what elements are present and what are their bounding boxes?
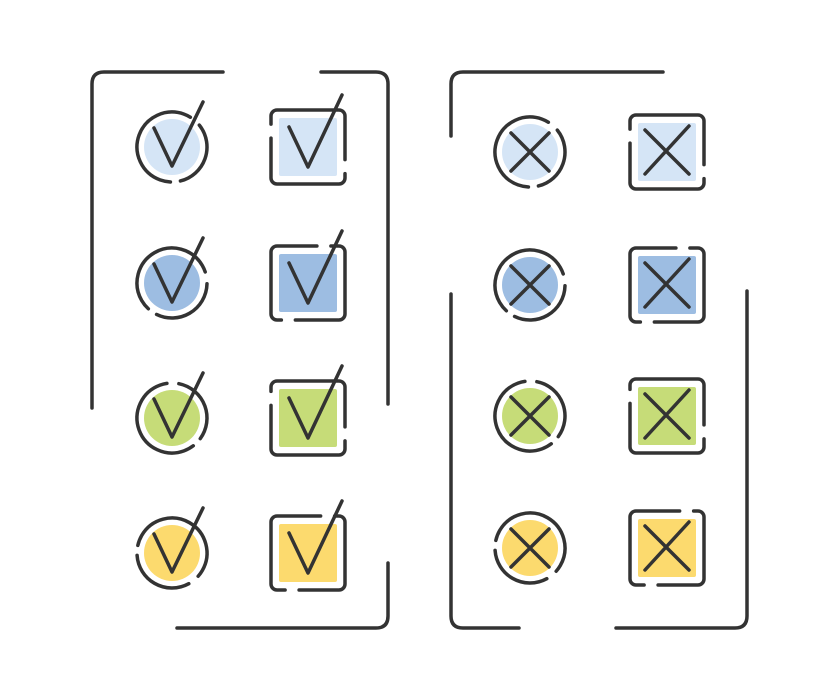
- icon: square cross green: [630, 379, 704, 453]
- panel: left frame: [92, 72, 388, 628]
- icon: circle cross green: [485, 371, 575, 461]
- icon: circle check light blue: [127, 102, 217, 192]
- icon: square cross blue: [630, 248, 704, 322]
- icon: circle cross light blue: [485, 107, 575, 197]
- icon: square check yellow: [271, 501, 345, 590]
- icon: square cross light blue: [630, 115, 704, 189]
- icon: circle cross yellow: [482, 500, 578, 596]
- icon: circle check yellow: [124, 505, 220, 601]
- icon: circle cross blue: [482, 237, 578, 333]
- icon: circle check green: [127, 373, 217, 463]
- icon: square check light blue: [271, 95, 345, 184]
- icon: square check green: [271, 366, 345, 455]
- icon: circle check blue: [124, 235, 220, 331]
- icon: square cross yellow: [630, 511, 704, 585]
- icon: square check blue: [271, 231, 345, 320]
- panel: right frame: [451, 72, 747, 628]
